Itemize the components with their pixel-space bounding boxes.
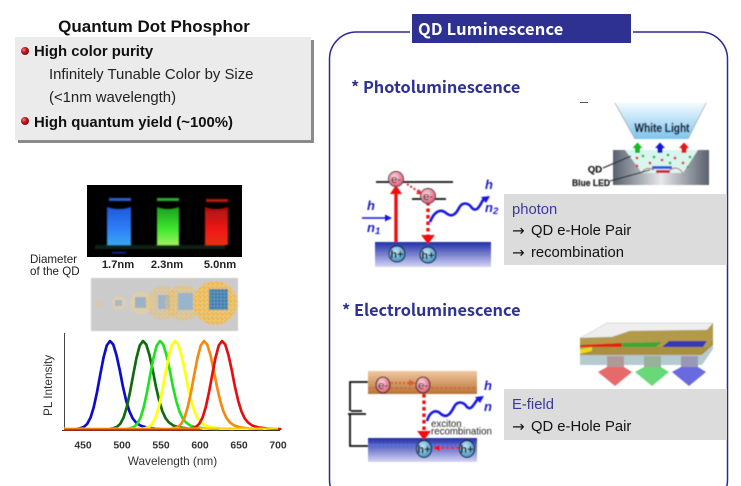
icon: bullet 2 — [21, 117, 29, 125]
electron 1 — [376, 377, 390, 393]
label: incoming photon: 1 — [375, 226, 380, 237]
text: QD diameter label: Diameter — [30, 253, 77, 266]
text: wavelength note: (<1nm wavelength) — [49, 90, 176, 106]
label: incoming photon: n — [367, 220, 375, 235]
text: QD diameter label — [30, 253, 80, 278]
label: QD: QD — [588, 164, 602, 176]
icon: QD LED device stack — [580, 323, 713, 386]
label: emitted photon: n — [484, 399, 492, 414]
heading: electroluminescence: * Electroluminescence — [342, 297, 521, 321]
text box: E-field process: → — [512, 418, 525, 436]
electron 2 — [416, 377, 430, 393]
label: emitted photon: h — [484, 378, 492, 393]
label: incoming photon — [367, 198, 380, 237]
text box: E-field process: QD e-Hole Pair — [531, 419, 631, 435]
title bar: QD Luminescence: QD Luminescence — [418, 16, 564, 40]
hole 2: h+ — [460, 444, 474, 456]
text box: photon process: recombination — [531, 245, 624, 261]
diagram: electroluminescence bands — [348, 371, 492, 462]
text box: photon process: photon — [512, 202, 557, 218]
electron 1: e- — [378, 380, 388, 392]
text: vial sizes: 2.3nm — [151, 259, 183, 271]
hole 2 — [460, 440, 474, 458]
label: emitted photon: n — [485, 200, 493, 215]
tick labels: 500 — [113, 440, 131, 452]
hole 2: h+ — [421, 250, 435, 262]
hole 1 — [416, 440, 432, 458]
text: vial sizes: 5.0nm — [204, 259, 236, 271]
text box: photon process: → — [512, 222, 525, 240]
curves: emission peaks — [64, 341, 280, 430]
arrow: green emission — [632, 142, 642, 153]
decorative mark — [580, 102, 588, 103]
label: Blue LED: Blue LED — [572, 178, 610, 189]
text: vial sizes: 1.7nm — [102, 259, 134, 271]
text: vial sizes — [102, 259, 236, 271]
photo: glowing QD vials — [87, 185, 242, 257]
arrow: red emission — [679, 142, 689, 153]
arrow: hole drift — [433, 444, 459, 452]
electron 2: e- — [418, 380, 428, 392]
tick labels — [74, 440, 287, 452]
arrow: emitted photon wave — [427, 396, 484, 421]
circuit: battery bracket — [348, 382, 368, 446]
text box: E-field process — [504, 389, 727, 440]
label: emitted photon — [485, 177, 499, 217]
arrow: electron drift — [391, 380, 416, 386]
arrow: incoming photon — [362, 214, 392, 222]
label: exciton recombination: recombination — [431, 427, 492, 438]
chart: PL intensity spectra — [41, 333, 287, 468]
icon: bullet 1 — [21, 47, 29, 55]
tick labels: 650 — [230, 440, 248, 452]
panel: QD luminescence frame — [330, 32, 728, 486]
arrow: relaxation — [407, 184, 423, 194]
tick labels: 550 — [152, 440, 170, 452]
tick labels: 450 — [74, 440, 92, 452]
label: emitted photon: 2 — [492, 206, 499, 217]
label: incoming photon: h — [367, 198, 375, 213]
diagram: photoluminescence energy levels — [362, 172, 499, 267]
label: emitted photon — [484, 378, 492, 414]
text: high color purity: High color purity — [34, 44, 154, 60]
panel: phosphor properties — [15, 37, 314, 143]
text: QD diameter label: of the QD — [30, 265, 80, 278]
axis: y — [64, 333, 66, 430]
icon: white light LED package — [572, 103, 709, 189]
hole 1: h+ — [417, 444, 431, 456]
axis title: PL intensity: PL Intensity — [41, 355, 55, 416]
diagram: QD size series — [91, 278, 238, 331]
arrow: blue emission — [655, 142, 665, 153]
text: high quantum yield: High quantum yield (~100%) — [34, 115, 233, 131]
hole 1: h+ — [390, 249, 404, 261]
text box: photon process: → — [512, 244, 525, 262]
axis: x — [62, 430, 280, 432]
label: exciton recombination: exciton — [431, 419, 462, 430]
text box: photon process — [504, 194, 727, 265]
band: electron transport — [368, 371, 477, 394]
text: infinitely tunable: Infinitely Tunable Color by Size — [49, 67, 253, 83]
tick labels: 700 — [269, 440, 287, 452]
arrow: exciton recombination — [417, 394, 431, 440]
arrow: blue light — [672, 356, 706, 386]
label: emitted photon: h — [485, 177, 493, 192]
label: exciton recombination — [431, 419, 492, 438]
axis title: wavelength: Wavelength (nm) — [128, 454, 217, 468]
heading: photoluminescence: * Photoluminescence — [351, 74, 520, 98]
arrow: excitation — [390, 185, 402, 242]
title bar: QD Luminescence — [412, 14, 631, 43]
arrow: red light — [598, 356, 632, 386]
text box: photon process: QD e-Hole Pair — [531, 223, 631, 239]
title: Quantum Dot Phosphor: Quantum Dot Phosphor — [58, 17, 250, 36]
label: white light: White Light — [634, 123, 690, 135]
electron 2: e- — [423, 191, 433, 203]
mask: frame gap behind title — [410, 28, 633, 38]
arrow: recombination — [421, 202, 435, 244]
arrow: emitted photon wave — [430, 196, 490, 222]
band: hole transport — [368, 438, 477, 462]
band: valence — [375, 242, 491, 267]
tick labels: 600 — [191, 440, 209, 452]
electron 1: e- — [391, 174, 401, 186]
arrow: green light — [635, 356, 669, 386]
text box: E-field process: E-field — [512, 397, 554, 413]
